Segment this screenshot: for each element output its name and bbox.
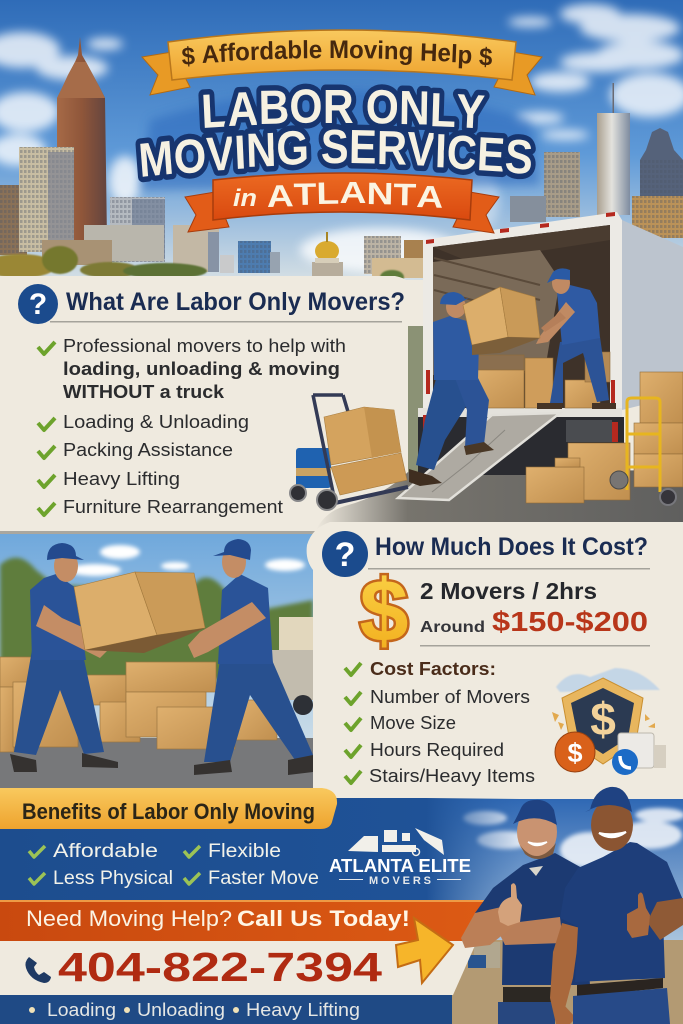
ramp <box>398 413 560 500</box>
cost factors list: Cost Factors: <box>370 659 496 679</box>
ribbon: in atlanta <box>185 173 499 233</box>
check list: Furniture Rearrangement <box>63 497 283 517</box>
ground <box>0 738 313 788</box>
icon: phone <box>25 957 51 983</box>
banner: call us today: Need Moving Help? <box>26 906 232 931</box>
in atlanta text: ATLANTA <box>266 175 444 215</box>
logo: atlanta elite movers: ATLANTA ELITE <box>329 856 471 876</box>
cost factors list: Number of Movers <box>370 687 530 707</box>
service list: Heavy Lifting <box>246 1000 360 1020</box>
phone number panel <box>0 941 477 995</box>
yellow dolly <box>610 398 676 505</box>
mover: left <box>10 543 118 772</box>
glow behind title <box>140 90 540 190</box>
cardboard boxes <box>0 657 277 752</box>
logo: atlanta elite movers <box>329 828 471 887</box>
in atlanta text: in <box>233 185 257 212</box>
cost factors list: Move Size <box>370 713 456 733</box>
check list: Heavy Lifting <box>63 469 180 489</box>
ribbon text: $ Affordable Moving Help $ <box>181 36 493 72</box>
mover: left with cap <box>461 800 590 1024</box>
arrow <box>396 918 453 983</box>
cost factors list: Hours Required <box>370 740 504 760</box>
panel: how much does it cost <box>307 522 683 798</box>
clouds <box>0 4 683 272</box>
men backdrop sky and yard <box>400 799 683 1024</box>
check list: Packing Assistance <box>63 440 233 460</box>
mover: right with cap <box>550 787 683 1024</box>
check marks <box>38 342 55 515</box>
check list <box>63 336 346 517</box>
photo: two movers carrying a box <box>0 531 320 788</box>
two smiling movers <box>461 787 683 1024</box>
carried box <box>74 572 205 653</box>
benefits list <box>53 841 319 889</box>
truck scene <box>290 212 683 530</box>
skyline background <box>0 0 683 284</box>
mover lifting, left <box>409 292 523 486</box>
heading icon: question mark <box>18 284 58 324</box>
background truck <box>270 617 313 715</box>
benefits heading tab: Benefits of Labor Only Moving <box>22 799 315 824</box>
title: labor only moving services <box>136 80 535 188</box>
hand truck with boxes <box>290 395 408 510</box>
capitol dome <box>312 232 343 276</box>
cylinder tower <box>597 83 630 215</box>
title: labor only moving services: LABOR ONLY <box>200 80 486 139</box>
panel: what are labor only movers <box>0 276 418 532</box>
check list: WITHOUT a truck <box>63 382 225 402</box>
heading: What Are Labor Only Movers? <box>66 288 405 316</box>
cost factors list <box>369 659 535 786</box>
stacked boxes right <box>526 372 683 503</box>
buildings <box>0 37 683 278</box>
clouds and trees <box>0 545 313 680</box>
heading icon: question mark: ? <box>29 288 47 321</box>
heading: How Much Does It Cost? <box>375 533 648 561</box>
heading icon: question mark <box>322 531 368 577</box>
phone number: 404-822-7394 <box>58 944 382 990</box>
cost factors list: Stairs/Heavy Items <box>369 766 535 786</box>
service list <box>29 1000 360 1020</box>
title: labor only moving services: MOVING SERVICES <box>136 121 535 188</box>
price text: Around <box>420 619 485 636</box>
benefits list: Flexible <box>208 841 281 862</box>
price text: 2 Movers / 2hrs <box>420 578 597 604</box>
service list: Loading <box>47 1000 116 1020</box>
icon: shield with dollar <box>552 668 666 775</box>
icon: shield with dollar: $ <box>590 693 616 745</box>
mover lifting, right <box>536 268 616 409</box>
price text <box>420 578 648 637</box>
service list: Unloading <box>137 1000 225 1020</box>
tree line <box>0 246 404 284</box>
benefits heading tab <box>0 788 337 829</box>
price text: $150-$200 <box>492 606 648 637</box>
heading icon: question mark: ? <box>335 536 355 574</box>
check list: Loading & Unloading <box>63 412 249 432</box>
logo: atlanta elite movers: MOVERS <box>369 875 431 887</box>
check list: loading, unloading & moving <box>63 359 340 379</box>
ground <box>316 470 683 530</box>
check list: Professional movers to help with <box>63 336 346 356</box>
banner: blue benefits band <box>0 788 520 902</box>
banner: call us today <box>0 900 484 941</box>
boxes inside truck <box>468 352 610 408</box>
check marks <box>345 663 361 783</box>
box being lifted <box>463 287 540 355</box>
truck body <box>418 212 683 475</box>
icon: shield with dollar: $ <box>567 738 583 768</box>
check marks <box>29 846 200 884</box>
icon: big dollar: $ <box>360 561 408 660</box>
bottom navy band <box>0 994 452 1024</box>
mover: right <box>188 539 313 775</box>
benefits list: Faster Move <box>208 868 319 889</box>
ribbon: affordable moving help <box>142 30 542 95</box>
benefits list: Affordable <box>53 841 158 862</box>
benefits list: Less Physical <box>53 868 173 889</box>
banner: call us today: Call Us Today! <box>237 906 410 931</box>
